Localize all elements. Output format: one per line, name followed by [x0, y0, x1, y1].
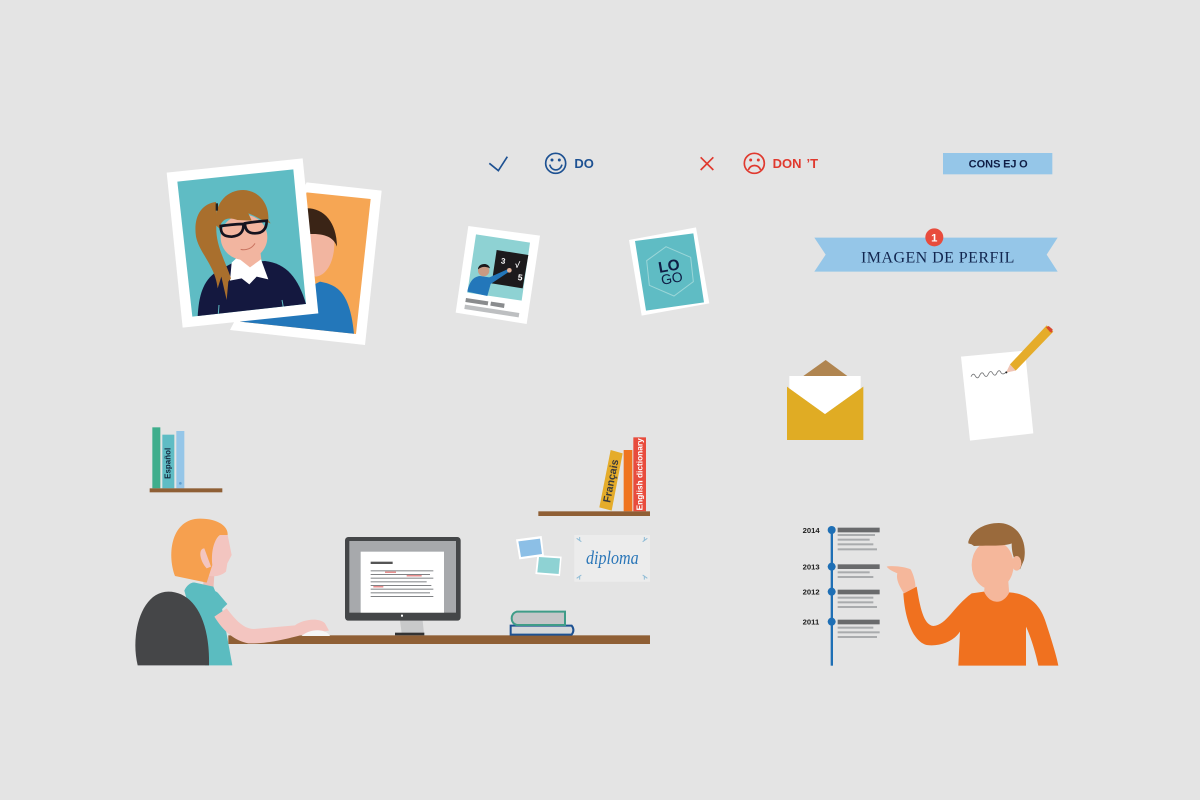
person	[171, 519, 330, 665]
panel: logo photo	[629, 227, 709, 316]
face	[221, 215, 267, 260]
hair	[216, 190, 271, 228]
panel: computer and shelf items	[345, 437, 650, 635]
icon: sad face	[744, 153, 764, 173]
label: do: DO	[574, 156, 594, 171]
monitor	[345, 537, 461, 635]
icon: check mark	[489, 157, 507, 171]
icon: cross	[701, 157, 713, 170]
logo text: GO	[660, 268, 684, 288]
panel: person at desk	[135, 427, 650, 665]
panel: teacher photo	[456, 226, 540, 324]
blackboard: 3	[500, 256, 507, 266]
ponytail	[195, 202, 231, 300]
icon: smiley	[546, 153, 566, 173]
logo text: LO	[657, 256, 681, 277]
banner: imagen de perfil	[814, 228, 1058, 272]
mouse	[302, 630, 330, 636]
front photo: woman on teal	[167, 158, 318, 328]
chair	[135, 592, 209, 665]
logo text	[657, 256, 684, 288]
panel: consejo tag: CONSEJO	[969, 159, 1028, 171]
desk	[228, 635, 650, 644]
left bookshelf: Español	[163, 448, 172, 479]
presenter	[887, 523, 1058, 666]
banner title: IMAGEN DE PERFIL	[861, 250, 1014, 267]
teacher figure	[467, 264, 512, 296]
diploma	[574, 535, 650, 582]
panel: timeline and presenter	[803, 523, 1058, 666]
neck	[240, 253, 262, 268]
label: don't: DON’T	[773, 156, 818, 171]
icon: envelope	[787, 360, 863, 440]
blackboard	[492, 250, 528, 288]
hexagon outline	[647, 247, 693, 296]
right bookshelf: Français	[601, 458, 621, 504]
timeline entry 2011: 2011	[803, 618, 820, 627]
timeline	[803, 526, 880, 666]
caption bars	[464, 298, 519, 317]
timeline entry 2012: 2012	[803, 588, 820, 597]
panel: consejo tag	[943, 153, 1052, 174]
blackboard: √	[514, 259, 521, 270]
glasses	[221, 221, 267, 237]
back photo: man on orange	[230, 182, 382, 345]
panel: profile photos	[167, 158, 382, 345]
right bookshelf	[538, 437, 650, 516]
badge number: 1	[931, 233, 937, 245]
blackboard: 5	[517, 272, 523, 283]
diploma: diploma	[586, 548, 639, 569]
right bookshelf: English dictionary	[635, 438, 645, 510]
panel: do / don't legend	[489, 153, 818, 173]
timeline entry 2014: 2014	[803, 526, 820, 535]
infographic canvas	[135, 152, 1058, 666]
collar	[230, 257, 268, 284]
icon: paper and pencil	[961, 325, 1053, 441]
sweater	[198, 261, 306, 317]
badge number	[925, 228, 943, 246]
smile	[241, 243, 255, 250]
left bookshelf	[150, 427, 222, 492]
pinned notes	[516, 536, 562, 576]
book stack	[511, 612, 573, 635]
timeline entry 2013: 2013	[803, 563, 820, 572]
